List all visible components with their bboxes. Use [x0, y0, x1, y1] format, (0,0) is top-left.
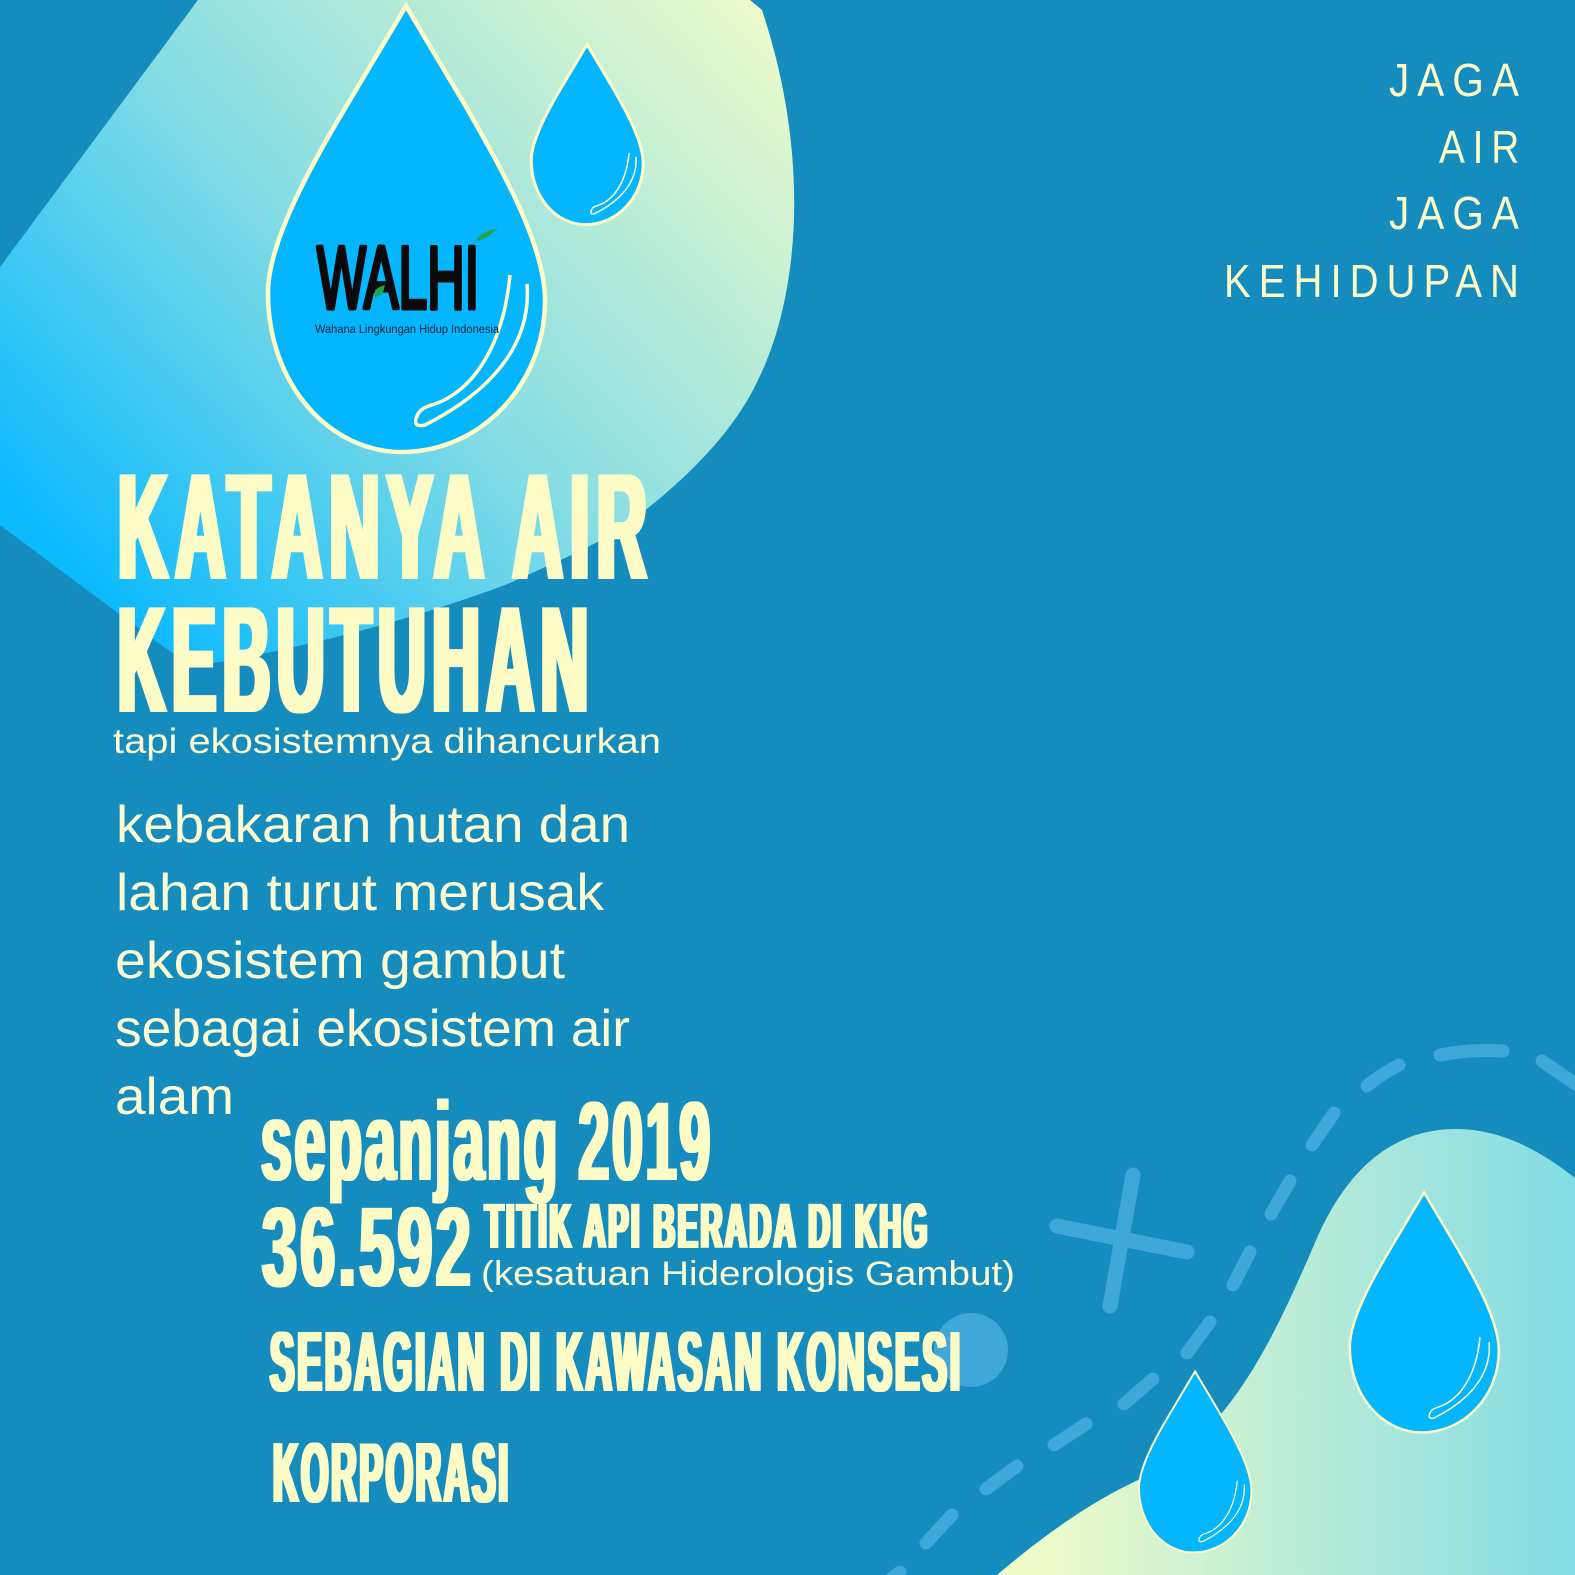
- statistic note: (kesatuan Hiderologis Gambut): [481, 1255, 1015, 1293]
- tagline top right: KEHIDUPAN: [1224, 255, 1527, 307]
- body text: ekosistem gambut: [115, 932, 566, 990]
- tagline top right: JAGA: [1389, 54, 1527, 106]
- body text: lahan turut merusak: [116, 864, 605, 922]
- closing statement: KORPORASI: [273, 1426, 511, 1521]
- tagline top right: [1224, 54, 1527, 307]
- logo subtitle: Wahana Lingkungan Hidup Indonesia: [315, 324, 500, 336]
- circle decoration: [934, 1313, 1008, 1387]
- tagline top right: JAGA: [1389, 187, 1527, 239]
- bottom-right gradient blob: [997, 1129, 1575, 1575]
- text: KEBUTUHAN: [118, 575, 595, 745]
- text: KATANYA AIR: [118, 442, 654, 612]
- icon: bottom right water drop: [1350, 1193, 1499, 1432]
- dashed path decoration: [890, 1050, 1575, 1575]
- text: sepanjang 2019: [261, 1079, 713, 1204]
- body text: kebakaran hutan dan: [116, 796, 630, 854]
- logo leaves: [375, 228, 498, 298]
- cross decoration: [1057, 1175, 1187, 1306]
- body text: alam: [115, 1068, 234, 1126]
- title: [118, 442, 654, 745]
- body text: [115, 796, 630, 1126]
- icon: large water drop with WALHI logo: [268, 6, 545, 452]
- subtitle: tapi ekosistemnya dihancurkan: [113, 722, 661, 761]
- body text: sebagai ekosistem air: [115, 1000, 630, 1058]
- icon: small top water drop: [531, 44, 643, 225]
- WALHI logo wordmark: WALHI: [317, 228, 479, 327]
- icon: bottom small water drop: [1139, 1371, 1251, 1553]
- tagline top right: AIR: [1439, 121, 1527, 173]
- text: TITIK API BERADA DI KHG: [485, 1190, 930, 1262]
- statistic number: 36.592: [262, 1184, 474, 1310]
- top-left gradient blob: [0, 0, 794, 663]
- closing statement: [270, 1315, 963, 1521]
